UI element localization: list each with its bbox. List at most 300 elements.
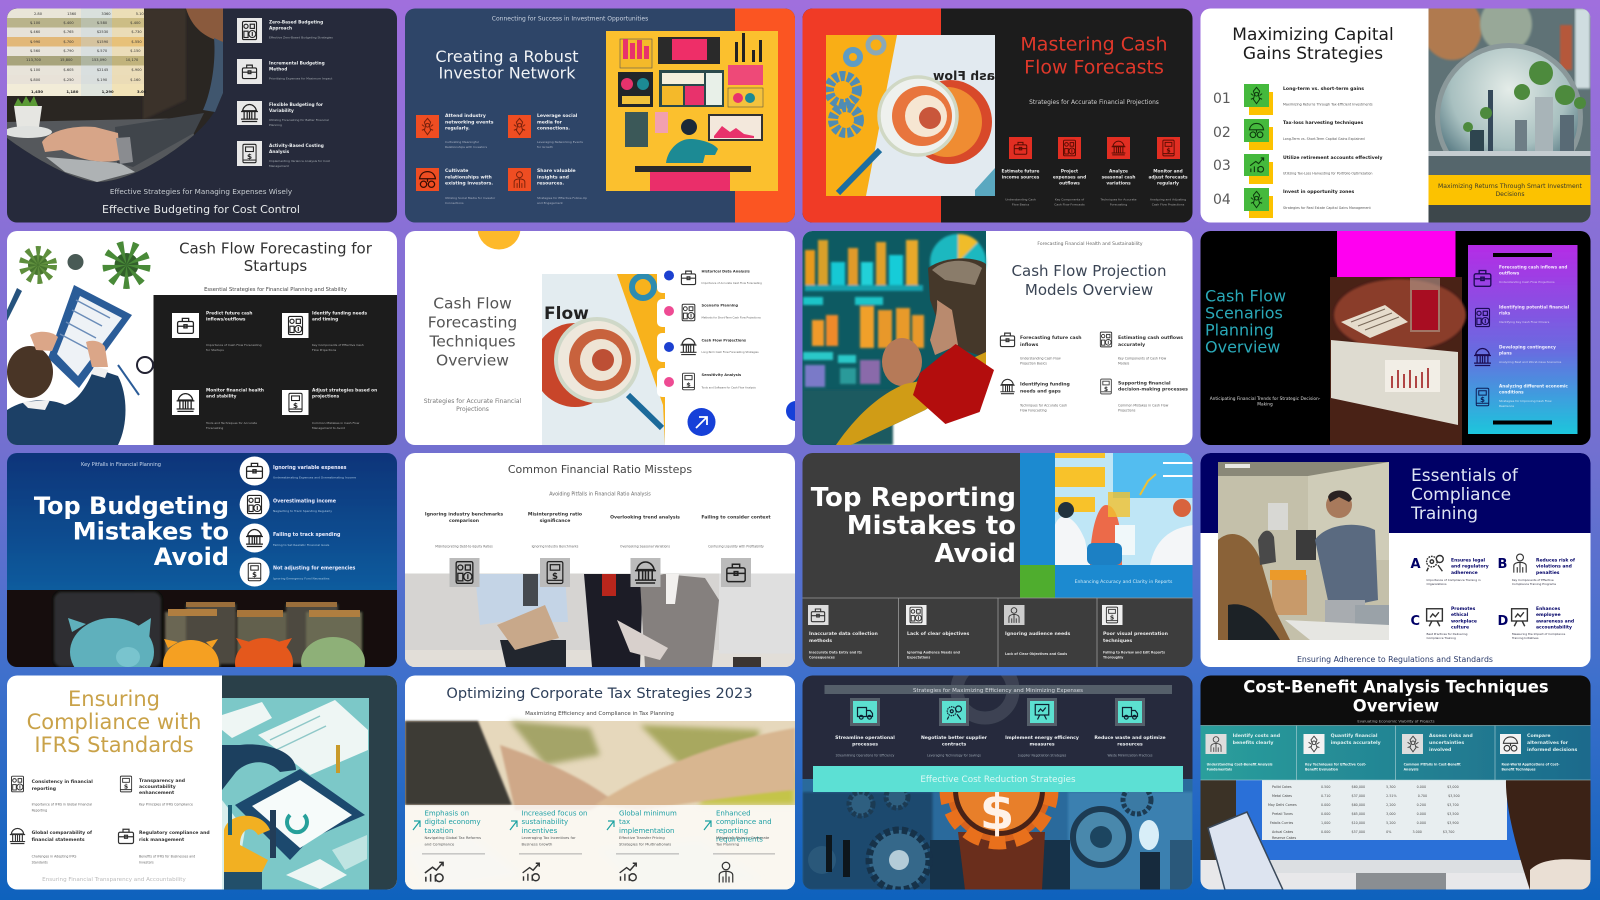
item: Analyzing economic conditions [1476,384,1568,408]
item: Consistency in financial reporting: Consistency in financial [32,780,93,785]
panel: Mastering Cash Flow Forecasts [802,8,1192,222]
arrow button [688,408,716,436]
item: Reduce waste: resources [1117,741,1143,747]
item 01: Maximizing Returns Through Tax-Efficient Investments [1283,102,1373,106]
item: Identify costs: Fundamentals [1207,768,1232,772]
photo: hands typing beside spreadsheet: $.100 $.605 $2145 $.900 [30,68,142,72]
item: Monitor and adjust [1148,137,1188,207]
teal title banner: Effective Cost Reduction Strategies [920,775,1076,785]
item: Analyze seasonal: Analyze [1109,170,1128,174]
item: global minimum tax: implementation [619,827,674,835]
item 04: Strategies for Real Estate Capital Gains Management [1283,206,1371,210]
item A: adherence [1451,570,1478,576]
item: Ignoring variable expenses: Underestimating Expenses and Overestimating Income [273,476,356,480]
item: Flexible Budgeting for Variability: Variability [269,108,294,114]
title: Overview [436,352,509,370]
item: Project expenses: Cash Flow Forecasts [1054,203,1085,207]
item: Zero-Based Budgeting Approach: Zero-Based Budgeting [269,20,323,26]
item card: Historical Data Analysis: Importance of Accurate Cash Flow Forecasting [702,281,762,285]
item: Regulatory compliance: risk management [139,837,185,843]
item: Identify costs: Identify costs and [1233,734,1280,739]
photo: spreadsheet on monitor: 0.000 $65,000 3,000 0.000 $3,500 [1321,812,1459,816]
subtitle: Strategies for Accurate Financial [424,398,521,405]
item: Leverage social media [508,113,583,149]
subtitle: Anticipating Financial Trends for Strategic Decision- [1210,397,1320,402]
item C: ethical [1451,612,1469,618]
title: Mistakes to [73,518,229,546]
item: Activity-Based Costing Analysis: Analysis [269,149,290,155]
item 01 [1213,84,1373,115]
item: Identifying funding: Flow Forecasting [1020,409,1047,413]
item B: penalties [1536,570,1560,576]
title: Cost-Benefit Analysis Techniques [1243,678,1549,696]
item: Overestimating income: Neglecting to Track Spending Regularly [273,509,332,513]
item card: Scenario Planning [657,299,789,327]
item: Regulatory compliance: Investors [139,860,154,864]
item D: Enhances [1536,607,1560,612]
item: sustainability incentives [510,810,587,881]
title: Flow Forecasts [1024,56,1164,78]
item: digital economy: Navigating Global Tax Reforms [424,836,481,840]
item: Failing to consider context: Failing to consider context [701,514,771,520]
title: Effective Budgeting for Cost Control [102,203,300,216]
dark side block [222,676,397,890]
item: Ignoring variable expenses [240,456,356,486]
item: Assess risks: Common Pitfalls in Cost-Benefit [1404,762,1461,766]
item: Leverage social media: Leveraging Networking Events [537,140,583,144]
item: Analyze seasonal: variations [1106,180,1131,186]
item B: Key Components of Effective [1512,578,1554,582]
item: Attend industry networking events: regularly. [445,126,470,132]
item: Identify costs: Understanding Cost-Benefit Analysis [1207,762,1273,766]
illustration: analyst with dashboards [606,31,778,191]
item: Transparency and accountability: enhancement [139,790,175,796]
item: Monitor financial health: and stability [206,394,237,400]
item: Analyzing economic conditions: conditions [1499,390,1524,394]
item: Analyzing economic conditions: Resilience [1499,404,1514,408]
item: Ignoring industry benchmarks: comparison [449,518,479,524]
title: Avoid [934,539,1016,569]
title: Optimizing Corporate Tax Strategies 2023 [446,685,753,702]
panel: Cost-Benefit Analysis Techniques Overview [1200,676,1591,890]
title: Scenarios [1205,304,1283,322]
banner: Decisions [1495,191,1525,198]
item: Lack of clear objectives: Ignoring Audience Needs and [907,650,960,654]
item: Misinterpreting ratio significance: significance [540,518,570,524]
illustration: isometric finance documents [222,698,369,890]
item: Implement energy: Supplier Negotiation Strategies [1018,754,1067,758]
item: sustainability incentives: Increased focus on [522,810,587,818]
item: global minimum tax [607,810,679,881]
item: Analyze seasonal: seasonal cash [1102,174,1135,180]
photo: desk with keyboard and report [1330,277,1466,445]
caption: Enhancing Accuracy and Clarity in Reports [1075,579,1173,585]
item: enhanced compliance [704,810,775,882]
item 01: 01 [1213,91,1231,107]
item: Failing to track spending: Failing to track spending [273,532,341,538]
item: Identify costs: benefits clearly [1233,740,1273,746]
footer line: Ensuring Financial Transparency and Accountability [42,877,187,883]
item: Developing contingency [1474,344,1562,365]
item: Supporting financial: decision-making processes [1118,387,1188,393]
title: Top Reporting [811,483,1016,513]
photo: spreadsheet on monitor: Reserve Cakes [1272,836,1296,840]
item: Forecasting future cash inflows: Forecasting future cash [1020,336,1082,341]
item: Ignoring audience needs: Ignoring audience needs [1005,631,1071,637]
item: Compare alternatives: Benefit Techniques [1502,768,1536,772]
item: Negotiate supplier: Leveraging Technology for Savings [927,754,981,758]
header line: Forecasting Financial Health and Sustainability [1037,241,1143,247]
title: Ensuring [68,687,160,711]
item: Share valuable insights [508,168,587,205]
item: Compare alternatives [1500,733,1577,772]
magenta block [1337,231,1456,277]
title: Avoid [154,543,229,571]
item: Not adjusting for emergencies: Ignoring Emergency Fund Necessities [273,576,330,580]
photo: spreadsheet on monitor: Pretail Tunes [1272,812,1293,816]
panel: Maximizing Capital Gains Strategies [1200,0,1590,223]
photo: spreadsheet on monitor: 0.710 $37,000 2.51% 0.700 $3,500 [1321,794,1460,798]
subtitle: Maximizing Efficiency and Compliance in Tax Planning [525,711,674,717]
item D: Training Initiatives [1511,636,1539,640]
item: Implement energy [1005,698,1079,758]
item: Attend industry networking events [416,113,494,149]
item A: Ensures legal [1451,558,1485,564]
footer line: Ensuring Adherence to Regulations and Standards [1297,655,1493,664]
item: Monitor financial health: Forecasting [206,426,223,430]
teal title banner [813,766,1183,792]
item: sustainability incentives: Leveraging Tax Incentives for [522,836,576,840]
photo: hands typing beside spreadsheet: 113,700 15,800 153,090 10,170 [26,58,139,62]
item: Inaccurate data collection: Inaccurate Data Entry and Its [809,650,862,654]
title: Models Overview [1025,281,1153,299]
item 02: Long-Term vs. Short-Term Capital Gains Explained [1283,137,1365,141]
item: Estimating cash outflows: accurately [1118,342,1145,348]
item: Inaccurate data collection: Inaccurate data collection [809,632,878,637]
item: Identifying potential risks: Identifying Key Cash Flow Drivers [1499,320,1550,324]
item: Developing contingency: Developing contingency [1499,344,1556,350]
item: Regulatory compliance [118,829,210,864]
item 03: 03 [1213,158,1231,174]
item: Attend industry networking events: networking events [445,119,494,125]
item: Quantify financial: Key Techniques for Effective Cost- [1305,762,1366,766]
item: Zero-Based Budgeting Approach: Effective Zero-Based Budgeting Strategies [269,36,333,40]
item: Reduce waste [1094,698,1166,758]
item: Identifying funding [1000,379,1070,413]
item: Overestimating income [240,490,337,519]
item: Adjust strategies: Management to Avoid [312,426,345,430]
item: Leverage social media: for Growth [537,145,553,149]
panel: Cash Flow Projection Models Overview [802,231,1192,445]
item: Forecasting future cash inflows: inflows [1020,342,1039,348]
item: Quantify financial: impacts accurately [1331,740,1381,746]
item: Zero-Based Budgeting Approach: Approach [269,26,292,32]
panel: Creating a Robust Investor Network [405,8,795,222]
item: Poor visual presentation: Thoroughly [1103,656,1124,660]
item: Forecasting future cash inflows [1000,333,1082,366]
item 04: Invest in opportunity zones [1283,189,1355,195]
item: Identify funding [282,310,367,352]
item A: Organizations [1426,582,1447,586]
item: Cultivate relationships [416,168,496,205]
item card: Cash Flow Projections: Long-Term Cash Flow Forecasting Strategies [702,350,759,354]
item: Activity-Based Costing Analysis: Activity-Based Costing [269,144,324,149]
item: Assess risks: involved [1429,747,1451,753]
item: Identifying potential risks [1476,304,1570,327]
title: Planning [1205,320,1274,340]
item: Identify funding: Identify funding needs [312,312,367,316]
photo: spreadsheet on monitor: 0.000 $57,000 0% 3.000 $3,700 [1321,830,1454,834]
item: Forecasting future cash inflows: Projection Basics [1020,362,1047,366]
title: Essentials of [1411,466,1518,486]
item: Cultivate relationships: relationships with [445,174,492,180]
item: Inaccurate data collection [808,605,878,660]
item card: Historical Data Analysis: Historical Data Analysis [702,270,750,274]
item: Supporting financial [1101,379,1188,413]
title: Cash Flow Forecasting for [179,240,372,258]
banner: Maximizing Returns Through Smart Investment [1438,183,1582,190]
title: Cash Flow [1205,286,1286,306]
item: Lack of clear objectives: Expectations [907,656,930,660]
item: Developing contingency: plans [1499,350,1512,356]
item card: Sensitivity Analysis: Tools and Software for Cash Flow Analysis [702,386,756,390]
item: Supporting financial: Supporting financial [1118,382,1171,386]
item B: Reduces risk of [1536,558,1575,564]
item: Monitor and adjust: adjust forecasts [1148,174,1188,180]
item: Predict future cash: Importance of Cash Flow Forecasting [206,343,261,347]
photo: city in magnifier [1422,0,1590,223]
photo: spreadsheet on monitor: Pallid Cakes [1272,785,1292,789]
dark content block [154,295,398,445]
item: Leverage social media: media for [537,119,563,125]
illustration: man reviewing clipboard [7,253,153,445]
item 02 [1213,119,1365,150]
subtitle: Essential Strategies for Financial Planning and Stability [204,287,347,293]
item: Transparency and accountability: Transparency and [139,779,185,784]
item: Estimate future income [1002,137,1040,207]
item: Activity-Based Costing Analysis [237,141,331,168]
photo: hands typing beside spreadsheet: $.560 $.790 $.570 $.150 [30,49,141,53]
item: Global comparability: Standards [32,860,48,864]
item: Estimating cash outflows: Models [1118,362,1130,366]
item: Global comparability: Global comparability of [32,831,92,836]
item: Forecasting cash inflows: outflows [1499,270,1520,276]
photo: handshake over world map [405,721,795,890]
item: Quantify financial: Benefit Evaluation [1305,768,1339,772]
photo: magnifier over target: ash Flow [932,68,995,83]
item 04 [1213,188,1371,218]
navy header block [1200,453,1590,533]
item: Identifying potential risks: Identifying potential financial [1499,304,1569,310]
item: Share valuable insights: and Engagement [537,201,564,205]
item: enhanced compliance: compliance and [716,818,772,826]
item: Project expenses [1053,137,1086,207]
item C: Best Practices for Delivering [1426,632,1467,636]
photo: piggy banks in jars [7,590,397,688]
title: Techniques [428,332,516,350]
photo: gears and dollar sign [802,738,1193,890]
item: Streamline operational [835,698,895,758]
item: sustainability incentives: Business Growth [522,843,553,847]
item: Analyze seasonal: Techniques for Accurate [1100,198,1136,202]
orange strip [735,8,795,222]
photo: spreadsheet on monitor: May Delhi Comes [1268,803,1297,807]
banner [1428,175,1590,205]
item: Negotiate supplier: Negotiate better supplier [921,736,987,741]
header band [824,685,1172,694]
item: Project expenses: Key Components of [1055,198,1084,202]
item: Project expenses: expenses and [1053,174,1086,180]
item: Consistency in financial reporting: Reporting [32,808,47,812]
photo: spreadsheet on monitor: 1,000 $10,000 5,200 0.000 $3,900 [1321,821,1459,825]
photo: hands typing beside spreadsheet: $.990 $.700 $1590 $.550 [30,40,142,44]
item: Compare alternatives: Real-World Applications of Cost- [1502,762,1559,766]
item A [1410,556,1489,586]
item: Forecasting future cash inflows: Understanding Cash Flow [1020,356,1061,360]
item: Project expenses: Project [1061,170,1078,174]
item C: culture [1451,625,1469,631]
item: Predict future cash [172,310,262,352]
item: Streamline operational: processes [852,741,878,747]
faint ring [957,662,1013,718]
title: Top Budgeting [34,492,229,520]
gradient list panel [1468,245,1578,434]
item: Inaccurate data collection: Consequences [809,656,835,660]
item: Share valuable insights: Strategies for Effective Follow-Up [537,196,587,200]
item: Adjust strategies: Adjust strategies based on [312,388,377,394]
item: Cultivate relationships: Utilizing Social Media for Investor [445,196,495,200]
item 02: 02 [1213,125,1231,141]
item: Poor visual presentation: techniques [1103,638,1132,644]
item: Identify funding: Key Components of Effective Cash [312,343,364,347]
photo: compliance trainer in office [1218,462,1389,640]
item: Estimate future income: Estimate future [1002,170,1039,174]
photo: magnifier over target [826,35,995,196]
panel: Essentials of Compliance Training [1200,453,1590,667]
item: Incremental Budgeting Method [237,59,333,84]
item D [1498,606,1574,640]
item: Supporting financial: Common Mistakes in Cash Flow [1118,404,1168,408]
item B: violations and [1536,564,1572,570]
photo: hands typing beside spreadsheet: $.800 $.250 $.190 $.160 [30,78,141,82]
item: Attend industry networking events: Cultivating Meaningful [445,140,479,144]
subtitle: Strategies for Accurate Financial Projections [1029,100,1159,106]
panel: Top Reporting Mistakes to Avoid [802,453,1193,667]
item 03: Utilizing Tax-Loss Harvesting for Portfolio Optimization [1283,172,1373,176]
photo: gears and dollar sign: $ [980,783,1014,841]
item: Ignoring audience needs: Lack of Clear Objectives and Goals [1005,652,1067,656]
item: Consistency in financial reporting: reporting [32,786,56,792]
title: Overview [1205,338,1280,356]
item card: Historical Data Analysis [657,264,789,293]
item D: awareness and [1536,618,1574,624]
item: Identify funding: Flow Projections [312,348,337,352]
item: Transparency and accountability: accountability [139,784,176,790]
item: Estimating cash outflows [1100,332,1183,366]
item: Adjust strategies: projections [312,394,340,400]
title: Forecasting [428,314,517,332]
subtitle: Projections [456,406,489,413]
panel: Optimizing Corporate Tax Strategies 2023 [405,676,795,890]
item: Transparency and accountability: Key Principles of IFRS Compliance [139,802,193,806]
item: Flexible Budgeting for Variability: Planning [269,123,282,127]
item: Global comparability [10,828,93,864]
subtitle: Avoiding Pitfalls in Financial Ratio Analysis [549,492,651,498]
item: Activity-Based Costing Analysis: Implementing Variance Analysis for Cost [269,159,330,163]
item: Incremental Budgeting Method: Method [269,66,287,72]
item: Identifying funding: Techniques for Accurate Cash [1020,404,1067,408]
item: Incremental Budgeting Method: Prioritizing Expenses for Maximum Impact [269,76,333,80]
header line: Key Pitfalls in Financial Planning [81,462,161,468]
item: Not adjusting for emergencies: Not adjusting for emergencies [273,566,355,572]
item card: Cash Flow Projections [657,333,789,362]
item: Not adjusting for emergencies [240,558,355,586]
item: Quantify financial: Quantify financial [1331,734,1377,739]
item: global minimum tax: Global minimum [619,810,677,818]
blue block and illustration [1020,453,1193,598]
item D: Measuring the Impact of Compliance [1512,632,1565,636]
item: sustainability incentives: sustainability [522,818,568,826]
item: Global comparability: Challenges in Adopting IFRS [32,854,76,858]
item C: C [1410,614,1420,629]
title: Creating a Robust [435,47,579,66]
item: Monitor financial health: Monitor financial health [206,388,264,394]
title: Common Financial Ratio Missteps [508,463,692,476]
photo: spreadsheet on monitor: Actual Cakes [1272,830,1294,834]
item: Implement energy: measures [1029,741,1055,747]
item: Predict future cash: Predict future cash [206,312,252,316]
item: Cultivate relationships: Cultivate [445,169,468,174]
subtitle: Evaluating Economic Viability of Projects [1357,718,1435,724]
item: global minimum tax: Effective Transfer Pricing [619,836,665,840]
item: digital economy: digital economy [424,818,481,826]
item: Ignoring variable expenses: Ignoring variable expenses [273,465,347,471]
item: Identifying funding: needs and gaps [1020,388,1061,394]
item: Identifying funding: Identifying funding [1020,382,1070,388]
item: Lack of clear objectives [906,605,969,660]
item: Assess risks: Analysis [1404,768,1419,772]
partial blue circle [786,401,806,421]
item 02: Tax-loss harvesting techniques [1283,120,1364,126]
item: Incremental Budgeting Method: Incremental Budgeting [269,62,325,66]
item: Share valuable insights: Share valuable [537,169,576,174]
item card: Scenario Planning: Scenario Planning [702,304,739,308]
title: Overview [1353,696,1439,716]
item: Identify funding: and timing [312,316,338,322]
item B: B [1498,557,1507,572]
photo: magnifier over target: Flow [544,304,589,324]
item: Estimating cash outflows: Estimating cash outflows [1118,336,1183,341]
item: Analyze seasonal [1100,137,1137,207]
item: Identifying potential risks: risks [1499,310,1511,316]
item: Ignoring industry benchmarks: Ignoring industry benchmarks [425,512,503,518]
item 04: 04 [1213,192,1231,208]
item: Misinterpreting ratio significance: Misinterpreting ratio [528,512,582,518]
title: Compliance with [27,710,201,734]
item: Poor visual presentation: Failing to Review and Edit Reports [1103,650,1165,654]
item: Failing to track spending [240,524,341,552]
item: Predict future cash: for Startups [206,348,224,352]
item: Monitor financial health: Tools and Techniques for Accurate [206,421,257,425]
item C: Compliance Training [1426,636,1456,640]
item: Ignoring audience needs [1004,605,1071,656]
item card: Sensitivity Analysis [657,368,789,397]
photo: hands typing beside spreadsheet: 1,450 1,180 1,290 3.00 [31,89,147,94]
item B [1498,554,1575,586]
item: Compare alternatives: alternatives for [1527,740,1569,746]
item: Compare alternatives: Compare [1527,734,1551,739]
item: Misinterpreting ratio significance [528,512,582,587]
